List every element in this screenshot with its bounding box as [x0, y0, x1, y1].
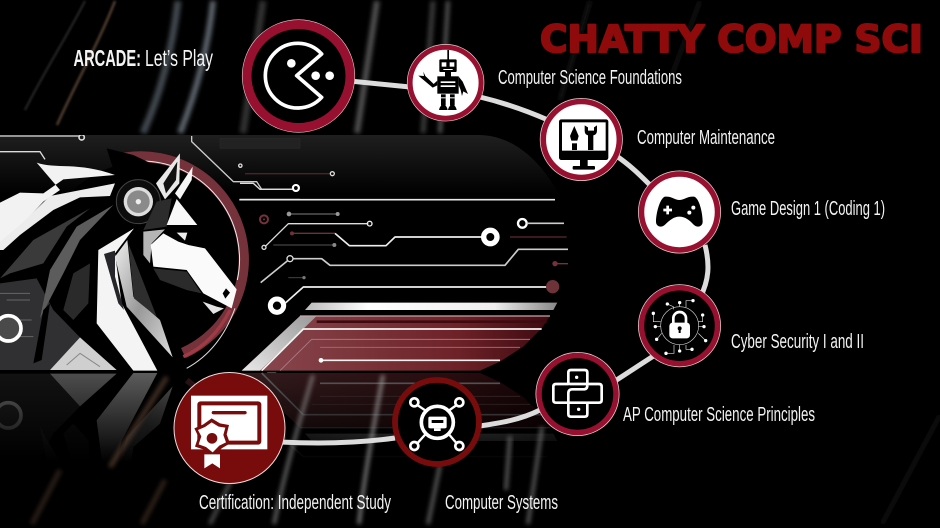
banner reflection: [0, 372, 557, 454]
background light streaks, lower: [32, 375, 940, 524]
node: certification: [174, 372, 285, 484]
label: Arcade: ARCADE:: [74, 45, 141, 71]
node: Arcade pacman: [242, 19, 355, 133]
node: computer maintenance monitor: [540, 98, 623, 181]
background light streaks, upper: [25, 1, 700, 133]
label: Computer Systems: Computer Systems: [445, 492, 558, 514]
node: computer systems network: [395, 380, 479, 464]
label: Cyber Security: Cyber Security I and II: [731, 331, 864, 353]
node: python logo: [536, 352, 620, 436]
node: cyber security lock: [638, 284, 721, 367]
label: Computer Science Foundations: Computer Science Foundations: [498, 67, 682, 89]
label: Computer Maintenance: Computer Maintenance: [637, 127, 775, 149]
label: Arcade: Let’s Play: [145, 45, 213, 71]
node: game controller: [638, 170, 721, 254]
title: CHATTY COMP SCI: [540, 18, 923, 61]
label: AP Computer Science Principles: AP Computer Science Principles: [623, 404, 815, 426]
label: Certification: Certification: Independent Study: [199, 492, 391, 514]
node: robot: [407, 44, 484, 121]
banner with horse mascot and circuit art: [0, 135, 570, 372]
connecting pathway line: [280, 81, 708, 443]
